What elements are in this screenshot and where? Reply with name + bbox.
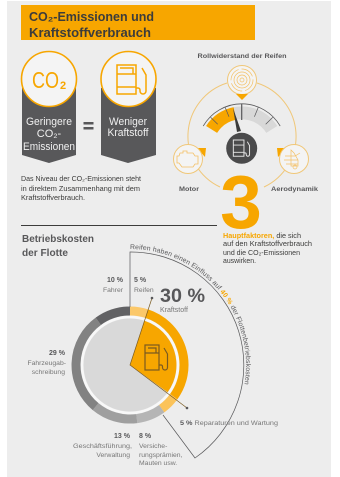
label: driver 10 %: Fahrer (103, 287, 124, 294)
title (21, 5, 255, 40)
chart: cost donut (76, 297, 188, 419)
label: lower CO2 emissions: CO₂- (37, 128, 62, 140)
text block: main factors: Hauptfaktoren, die sich (223, 231, 301, 240)
icon: equals sign (84, 122, 94, 130)
callout arc: 40 % bracket (130, 244, 251, 458)
label: driver 10 %: 10 % (107, 277, 124, 284)
label: less fuel: Weniger (109, 116, 147, 128)
inner disc (84, 318, 176, 412)
label: driver 10 % (103, 277, 124, 294)
label: insurance 8 %: rungsprämien, (139, 452, 183, 459)
title: Kraftstoffverbrauch (29, 25, 151, 40)
fuel wedge (130, 321, 176, 392)
icon: CO2 circle (22, 52, 76, 106)
label: less fuel: Kraftstoff (108, 127, 149, 139)
text block: main factors: auf den Kraftstoffverbrauch (223, 239, 312, 248)
icon: tyre (228, 66, 256, 100)
label: less fuel (108, 116, 149, 139)
title: CO₂-Emissionen und (29, 9, 154, 24)
diagram: three factors ring (188, 83, 296, 187)
label: depreciation 29 %: schreibung (32, 369, 65, 376)
label: rolling resistance: Rollwiderstand der Reifen (198, 53, 286, 60)
panel: less fuel (101, 52, 156, 163)
label: insurance 8 %: 8 % (139, 433, 152, 440)
label: tyres 5 %: Reifen (134, 287, 154, 294)
panel: lower CO2 emissions (22, 52, 76, 163)
callout arc: 40 % bracket: Reifen haben einen Einfluss auf 40 % der Flottenbetriebskosten. (130, 244, 251, 384)
label: lower CO2 emissions (23, 116, 75, 153)
label: depreciation 29 %: Fahrzeugab- (27, 360, 66, 367)
icon: fuel pump in wedge (145, 345, 168, 370)
label: management 13 %: 13 % (114, 433, 131, 440)
label: fuel 30 %: 30 % (160, 286, 205, 307)
icon: CO2 circle: 2 (60, 80, 66, 92)
gauge needle (233, 108, 241, 132)
label: tyres 5 %: 5 % (134, 277, 147, 284)
label: depreciation 29 %: 29 % (49, 350, 66, 357)
leader lines (130, 298, 187, 408)
label: management 13 %: Verwaltung (96, 452, 130, 459)
label: insurance 8 %: Mauten usw. (139, 460, 177, 467)
gauge (203, 104, 280, 164)
text block: CO2 explanation: Kraftstoffverbrauch. (21, 195, 85, 202)
label: fuel 30 %: Kraftstoff (160, 307, 188, 314)
icon: fuel pump in gauge (226, 133, 257, 164)
heading: operating costs: der Flotte (22, 248, 68, 259)
divider (21, 225, 217, 226)
label: insurance 8 %: Versiche- (139, 443, 167, 450)
text block: CO2 explanation (21, 176, 141, 202)
label: aerodynamics: Aerodynamik (271, 186, 318, 193)
text block: CO2 explanation: in direktem Zusammenhang mit dem (21, 186, 140, 193)
label: lower CO2 emissions: Emissionen (23, 141, 75, 153)
label: repairs 5 %: 5 % Reparaturen und Wartung (180, 420, 278, 427)
big number 3: 3 (220, 160, 262, 244)
label: engine: Motor (179, 186, 199, 193)
label: management 13 %: Geschäftsführung, (73, 443, 132, 450)
icon: CO2 circle: CO (32, 67, 59, 93)
text block: main factors: auswirken. (223, 256, 256, 265)
heading: operating costs: Betriebskosten (22, 234, 94, 245)
label: depreciation 29 % (27, 350, 66, 376)
text block: main factors: und die CO₂-Emissionen (223, 248, 300, 257)
icon: aerodynamics (277, 144, 308, 174)
label: tyres 5 % (134, 277, 154, 294)
label: lower CO2 emissions: Geringere (26, 116, 72, 128)
icon: fuel pump circle (101, 52, 156, 106)
text block: CO2 explanation: Das Niveau der CO₂-Emissionen steht (21, 176, 141, 183)
heading: operating costs (22, 234, 94, 259)
label: management 13 % (73, 433, 132, 459)
label: insurance 8 % (139, 433, 183, 467)
icon: engine (174, 144, 206, 174)
text block: main factors (223, 231, 312, 265)
